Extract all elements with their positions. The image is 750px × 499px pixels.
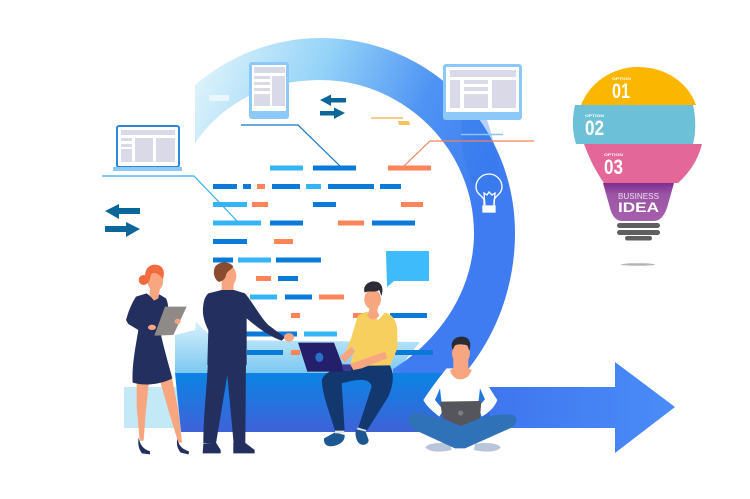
connector lines (102, 118, 534, 222)
man cross-legged with laptop (408, 337, 516, 452)
speech bubble (386, 251, 429, 287)
bulb section: option 03: 03 (604, 156, 623, 179)
bulb section: business idea (603, 183, 674, 221)
pale rectangle behind woman (124, 387, 184, 428)
bulb section: option 01 (581, 67, 696, 105)
bulb section: option 01: 01 (612, 80, 630, 103)
small yellow marks (398, 121, 410, 125)
man standing figure (203, 262, 294, 453)
icon: arrows left (105, 204, 140, 237)
bulb section: business idea: BUSINESS (618, 192, 659, 201)
bulb section: option 02: 02 (585, 117, 604, 140)
circular ring arrow (195, 38, 515, 373)
bulb screw base (617, 223, 660, 240)
bulb shadow (621, 263, 655, 266)
bulb section: option 03 (584, 144, 702, 183)
bulb section: option 02 (573, 105, 695, 144)
white dash on ring (209, 95, 229, 101)
big right arrow (490, 362, 675, 453)
bulb section: option 01: OPTION (612, 76, 631, 81)
light band above base (175, 322, 420, 373)
code dashes (213, 166, 433, 355)
base platform (175, 373, 490, 432)
icon: light bulb on ring (476, 174, 502, 212)
icon: monitor (443, 64, 522, 120)
woman figure (126, 265, 189, 454)
bulb section: business idea: IDEA (618, 199, 659, 215)
ring shading under monitor (461, 120, 500, 208)
icon: laptop (113, 126, 182, 171)
bulb section: option 03: OPTION (604, 152, 623, 157)
icon: arrows top (320, 94, 346, 119)
man sitting with laptop (298, 281, 397, 446)
bulb section: option 02: OPTION (585, 113, 604, 118)
icon: tablet (249, 62, 289, 119)
light bulb infographic (573, 67, 702, 266)
